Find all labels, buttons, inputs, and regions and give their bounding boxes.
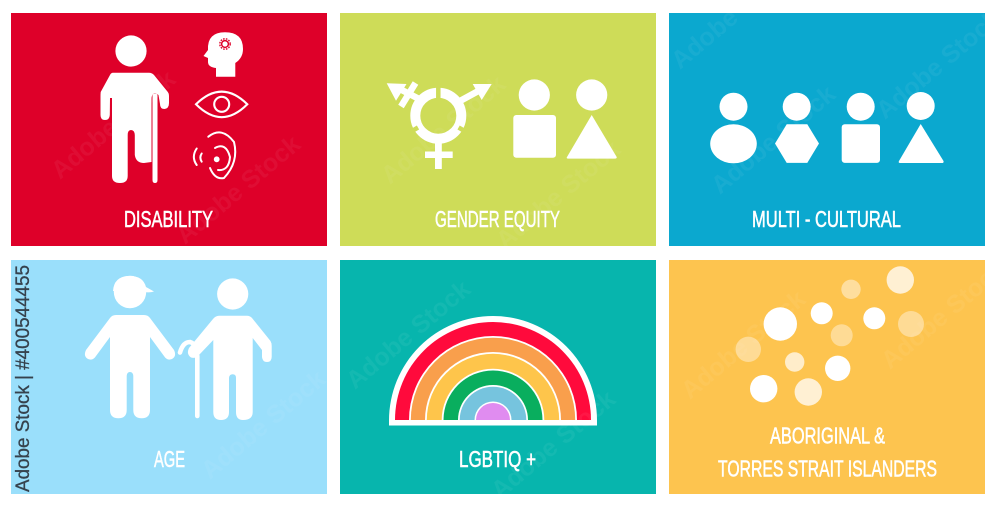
label: aboriginal and torres strait islanders: ABORIGINAL & — [770, 422, 885, 448]
panel: multi-cultural — [669, 13, 985, 246]
side credit: stock id: Adobe Stock | #400544455 — [12, 265, 34, 492]
watermark: adobe stock overlays: Adobe Stock — [486, 385, 621, 505]
label: gender equity: GENDER EQUITY — [435, 206, 560, 232]
watermark: adobe stock overlays: Adobe Stock — [171, 130, 306, 250]
watermark: adobe stock overlays: Adobe Stock — [491, 135, 626, 255]
icon: figure with hexagon body — [775, 93, 819, 163]
label: aboriginal and torres strait islanders — [718, 422, 937, 482]
panel: age — [11, 260, 327, 494]
icon: elderly person with cane — [180, 278, 272, 420]
watermark: adobe stock overlays: Adobe Stock — [376, 70, 511, 190]
icon: ear with sound waves — [194, 132, 235, 178]
panel: gender equity — [340, 13, 656, 246]
label: disability: DISABILITY — [124, 206, 213, 232]
icon: figure with triangle body — [567, 79, 617, 159]
watermark: adobe stock overlays: Adobe Stock — [46, 65, 181, 185]
watermark: adobe stock overlays: Adobe Stock — [341, 275, 476, 395]
label: age: AGE — [154, 446, 185, 472]
icon: dots — [736, 266, 924, 406]
icon: figure with ellipse body — [710, 93, 757, 163]
label: multi-cultural: MULTI - CULTURAL — [752, 206, 901, 232]
label: lgbtiq+: LGBTIQ + — [459, 446, 536, 472]
panel: disability — [11, 13, 327, 246]
icon: figure with square body — [513, 79, 556, 158]
icon: person with cap — [85, 276, 175, 418]
panel: aboriginal and torres strait islanders — [669, 260, 985, 494]
icon: figure with square body — [842, 93, 880, 163]
panel: lgbtiq+ — [340, 260, 656, 494]
icon: rainbow — [389, 316, 597, 426]
watermark: adobe stock overlays: Adobe Stock — [706, 80, 841, 200]
watermark: adobe stock overlays: Adobe Stock — [676, 285, 811, 405]
icon: head with gear — [204, 32, 243, 77]
icon: transgender symbol — [387, 83, 492, 169]
icon: figure with triangle body — [899, 92, 944, 163]
watermark: adobe stock overlays: Adobe Stock — [196, 365, 331, 485]
icon: person with cane — [100, 35, 169, 183]
icon: eye — [196, 92, 247, 117]
